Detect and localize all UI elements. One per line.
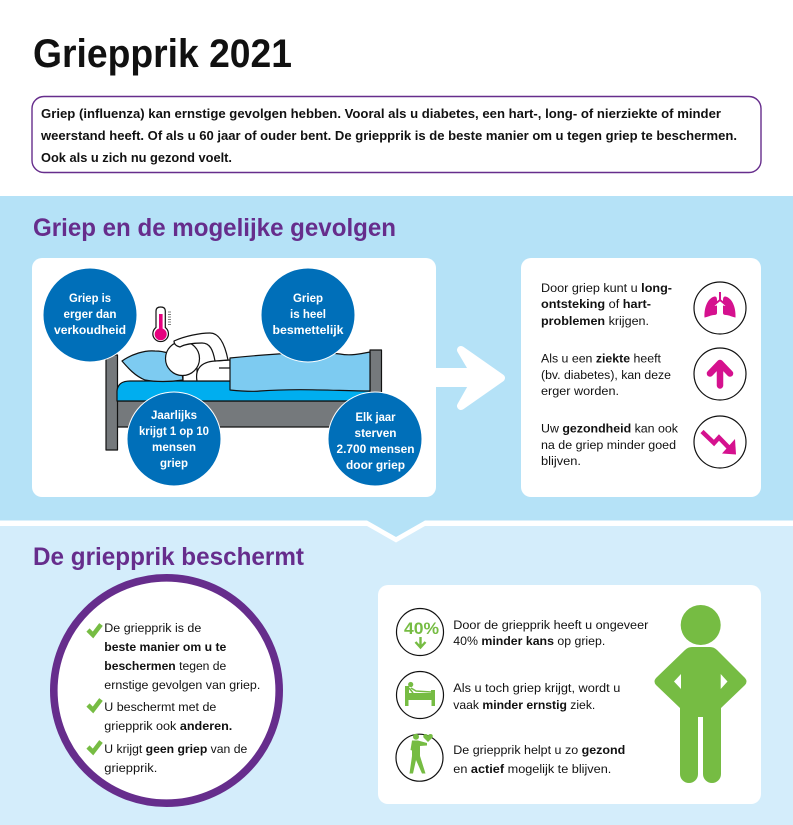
illustration: bed with sick person [106,333,382,450]
callout: griep is erger dan verkoudheid: Griep is [69,291,111,305]
text: gezondheid: Uw gezondheid kan ook [541,422,679,436]
checklist text 1 [104,621,260,692]
checklist text 2 [104,700,232,733]
text: gezond en actief: en actief mogelijk te blijven. [453,762,611,776]
figure: green standing person [654,605,746,783]
text: ziekte: (bv. diabetes), kan deze [541,368,671,382]
intro text box: weerstand heeft. Of als u 60 jaar of ouder bent. De griepprik is de beste manier om u tegen griep te beschermen. [40,128,737,143]
callout: jaarlijks 1 op 10: mensen [152,440,196,454]
icon: zigzag arrow down [694,416,746,468]
callout: griep is heel besmettelijk [261,268,355,362]
callout: elk jaar 2.700 sterfgevallen: door griep [346,458,405,472]
icon: thermometer [153,307,171,342]
text: minder ernstig: Als u toch griep krijgt, wordt u [453,681,620,695]
arrow: right [436,350,501,406]
text: gezond en actief [453,743,625,776]
section background: griep gevolgen [0,196,793,537]
check 1 [88,624,101,635]
callout: jaarlijks 1 op 10 [127,392,221,486]
icon: 40 percent down [396,608,444,656]
callout: griep is heel besmettelijk: is heel [290,307,326,321]
icon: person with heart [396,734,443,781]
intro text box [32,96,761,172]
panel: gevolgen [521,258,761,497]
callout: griep is heel besmettelijk: besmettelijk [272,323,344,337]
text: ziekte [541,352,671,398]
checklist text 2: U beschermt met de [104,700,216,714]
checklist text 1: beste manier om u te [104,640,226,654]
checklist text 2: griepprik ook anderen. [104,719,232,733]
heading: de griepprik beschermt: De griepprik beschermt [33,543,305,571]
icon: person in bed [396,672,444,718]
callout: jaarlijks 1 op 10: griep [160,456,188,470]
text: gezond en actief: De griepprik helpt u zo gezond [453,743,625,757]
text: gezondheid: blijven. [541,454,581,468]
checklist text 1: beschermen tegen de [104,659,226,673]
callout: griep is erger dan verkoudheid [43,268,137,362]
callout: jaarlijks 1 op 10: krijgt 1 op 10 [139,424,209,438]
callout: elk jaar 2.700 sterfgevallen [328,392,422,486]
intro text box: Griep (influenza) kan ernstige gevolgen hebben. Vooral als u diabetes, een hart-, long- of nierziekte of minder [41,106,721,121]
callout: jaarlijks 1 op 10: Jaarlijks [151,408,197,422]
callout: elk jaar 2.700 sterfgevallen: sterven [354,426,396,440]
callout: griep is erger dan verkoudheid: verkoudheid [54,323,126,337]
panel: voordelen griepprik [378,585,761,804]
check 3 [88,742,101,752]
title: Griepprik 2021 [33,32,292,76]
check 2 [88,700,101,710]
text: longontsteking: Door griep kunt u long- [541,281,672,295]
text: gezondheid [541,422,679,468]
checklist text 3: U krijgt geen griep van de [104,742,247,756]
text: longontsteking [541,281,672,328]
icon: arrow up [694,348,746,400]
callout: elk jaar 2.700 sterfgevallen: 2.700 mensen [336,442,414,456]
callout: elk jaar 2.700 sterfgevallen: Elk jaar [356,410,396,424]
text: minder ernstig: vaak minder ernstig ziek. [453,698,595,712]
section chevron divider [0,515,793,542]
checklist text 1: De griepprik is de [104,621,201,635]
text: gezondheid: na de griep minder goed [541,438,676,452]
intro text box: Ook als u zich nu gezond voelt. [41,150,232,165]
checklist text 3: griepprik. [104,761,157,775]
icon: 40 percent down: 40% [404,619,439,638]
text: longontsteking: ontsteking of hart- [541,297,651,311]
text: minder kans: Door de griepprik heeft u ongeveer [453,618,648,632]
text: ziekte: Als u een ziekte heeft [541,352,662,366]
checklist text 3 [104,742,247,775]
text: minder kans: 40% minder kans op griep. [453,634,605,648]
panel: griep illustration [32,258,436,497]
checklist text 1: ernstige gevolgen van griep. [104,678,260,692]
section background: griepprik beschermt [0,520,793,825]
text: minder ernstig [453,681,620,712]
callout: griep is erger dan verkoudheid: erger dan [64,307,116,321]
text: ziekte: erger worden. [541,384,619,398]
icon: lungs [694,282,746,334]
text: minder kans [453,618,648,648]
panel: purple circle with checklist [54,578,279,803]
callout: griep is heel besmettelijk: Griep [293,291,323,305]
text: longontsteking: problemen krijgen. [541,314,649,328]
heading: griep en de mogelijke gevolgen: Griep en de mogelijke gevolgen [33,214,396,242]
